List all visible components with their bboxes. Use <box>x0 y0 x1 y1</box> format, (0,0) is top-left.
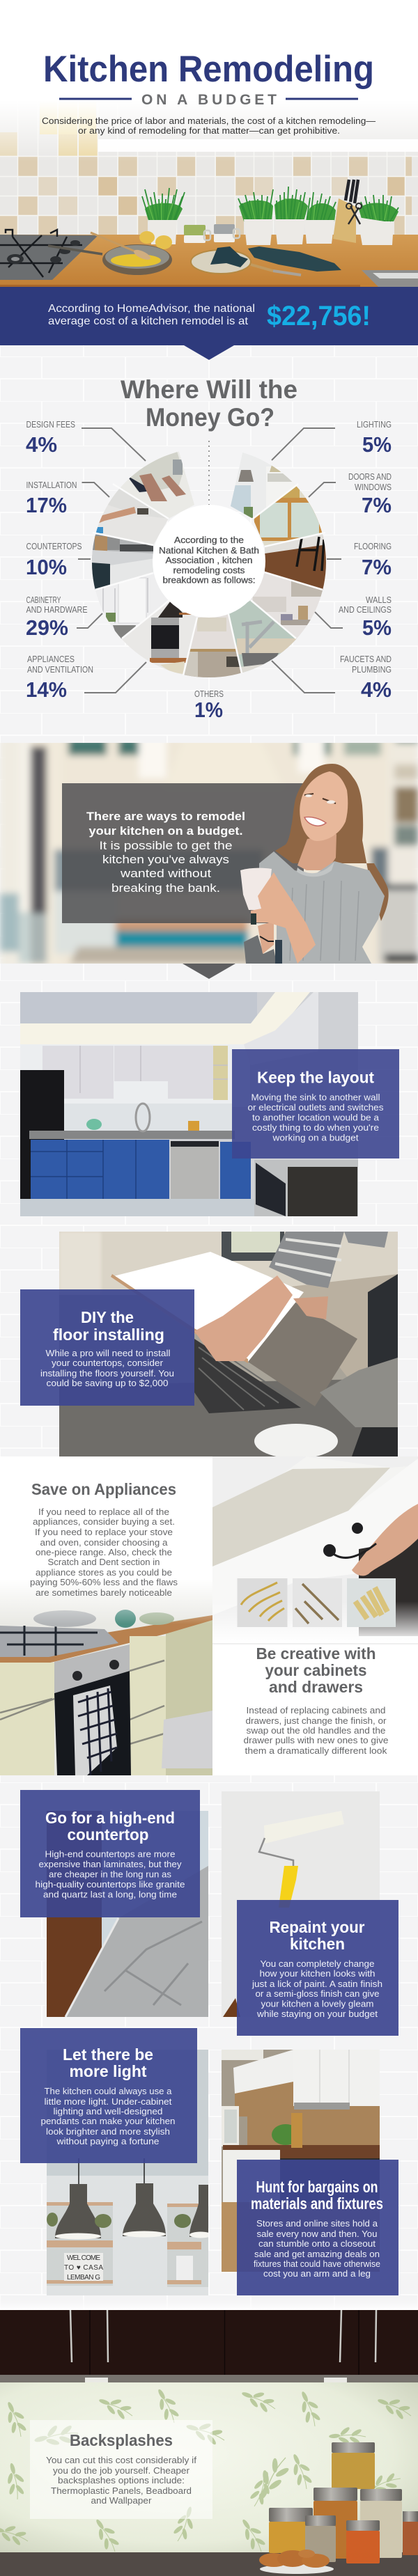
text box <box>20 1790 200 1917</box>
label: flooring <box>327 541 392 579</box>
pendant lights photo: TO ♥ CASA <box>64 2264 103 2272</box>
drawer photo <box>212 1456 418 1644</box>
pasta <box>139 231 172 249</box>
callout: donut center: According to the <box>174 535 244 545</box>
body text: The kitchen could always use a <box>45 2087 172 2096</box>
wedge: faucets <box>229 600 297 673</box>
body text <box>248 1093 383 1143</box>
box text: wanted without <box>120 867 211 880</box>
body text: are sometimes barely noticeable <box>36 1587 172 1598</box>
body text: could be saving up to $2,000 <box>46 1379 169 1388</box>
body text: installing the floors yourself. You <box>40 1369 174 1379</box>
label: appliances and ventilation <box>26 654 146 702</box>
heading: Let there be <box>63 2045 153 2064</box>
wedge: appliances <box>121 601 196 674</box>
label: walls and ceilings: WALLS <box>366 595 392 605</box>
countertop <box>0 235 418 287</box>
label: appliances and ventilation: 14% <box>26 677 67 702</box>
banner: average cost <box>0 287 418 360</box>
body text <box>46 2455 196 2506</box>
wedge: lighting <box>231 453 293 518</box>
text box <box>237 2160 398 2295</box>
body text: look brighter and more stylish <box>46 2127 170 2137</box>
label: design fees: DESIGN FEES <box>26 419 75 430</box>
heading: Save on Appliances <box>31 1480 176 1498</box>
storage jars <box>269 2442 418 2563</box>
gas stove <box>0 230 98 280</box>
label: others: 1% <box>194 698 223 722</box>
label: faucets and plumbing <box>272 654 392 702</box>
body text: can stumble onto a closeout <box>258 2239 376 2249</box>
callout: donut center <box>153 505 265 618</box>
label: walls and ceilings: 5% <box>362 615 392 640</box>
sink <box>362 270 418 287</box>
body text: little more light. Under-cabinet <box>45 2097 172 2107</box>
panel: woman in kitchen photo <box>0 738 418 968</box>
body text: sale every now and then. You <box>256 2229 378 2239</box>
panel: hunt for bargains <box>222 2050 398 2295</box>
heading: Hunt for bargains on <box>256 2178 378 2196</box>
body text: and quartz last a long, long time <box>43 1890 177 1899</box>
heading <box>45 1809 175 1844</box>
body text: your countertops, consider <box>52 1358 163 1368</box>
label: others: OTHERS <box>194 689 224 699</box>
label: flooring: FLOORING <box>354 541 392 551</box>
text box <box>30 2420 212 2519</box>
heading: floor installing <box>53 1326 164 1344</box>
woman <box>240 764 389 964</box>
label: lighting: 5% <box>362 432 392 457</box>
text box <box>20 1289 194 1406</box>
leaf wallpaper <box>0 2380 418 2554</box>
text box <box>62 783 304 923</box>
heading: Keep the layout <box>257 1068 374 1086</box>
body text: high-quality countertops like granite <box>35 1880 185 1890</box>
label: faucets and plumbing: 4% <box>361 677 392 702</box>
label: doors and windows <box>309 471 392 517</box>
body text: Thermoplastic Panels, Beadboard <box>51 2485 192 2496</box>
body text: fixtures that could have otherwise <box>254 2259 380 2269</box>
body text <box>251 1959 382 2019</box>
label: walls and ceilings: AND CEILINGS <box>339 604 392 615</box>
heading: countertop <box>67 1825 149 1844</box>
intro text: Considering the price of labor and materials, the cost of a kitchen remodeling— <box>42 116 376 126</box>
body text: how your kitchen looks with <box>259 1969 376 1979</box>
body text: just a lick of paint. A satin finish <box>251 1979 382 1989</box>
body text: them a dramatically different look <box>245 1745 387 1756</box>
cutting board with kale <box>191 246 341 275</box>
heading: your cabinets <box>265 1661 366 1679</box>
wedge: flooring <box>265 534 326 590</box>
body text: sale and get amazing deals on <box>254 2249 380 2259</box>
body text: you do the job yourself. Cheaper <box>53 2465 190 2476</box>
heading: where will the money go: Where Will the <box>121 375 297 404</box>
label: cabinetry and hardware: AND HARDWARE <box>26 604 88 615</box>
text box <box>232 1049 399 1159</box>
body text <box>40 1349 174 1388</box>
kitchen photo <box>20 992 358 1216</box>
label: lighting <box>272 419 392 460</box>
potted herbs <box>142 187 398 245</box>
body text: or electrical outlets and switches <box>248 1103 383 1113</box>
body text: Instead of replacing cabinets and <box>247 1705 386 1715</box>
heading <box>53 1308 164 1344</box>
label: design fees: 4% <box>26 432 57 457</box>
label: installation: INSTALLATION <box>26 480 77 490</box>
body text: If you need to replace your stove <box>35 1527 173 1537</box>
label: faucets and plumbing: PLUMBING <box>352 664 392 675</box>
knife block <box>333 180 362 243</box>
heading: where will the money go <box>121 375 297 432</box>
heading: materials and fixtures <box>251 2194 383 2213</box>
pendant lights photo: LEMBAN G <box>67 2274 100 2282</box>
body text: While a pro will need to install <box>46 1349 170 1358</box>
body text: Stores and online sites hold a <box>256 2219 378 2229</box>
label: cabinetry and hardware <box>26 595 102 640</box>
body text: If you need to replace all of the <box>38 1507 169 1517</box>
floor tiler photo <box>59 1232 398 1459</box>
label: design fees <box>26 419 146 461</box>
body text: without paying a fortune <box>56 2137 160 2146</box>
label: flooring: 7% <box>362 555 392 579</box>
wedge: countertops <box>92 534 153 590</box>
body text: and oven, consider choosing a <box>40 1537 168 1548</box>
body text: swap out the old handles and the <box>247 1725 386 1736</box>
panel: save on appliances <box>0 1456 212 1775</box>
label: countertops: COUNTERTOPS <box>26 541 82 551</box>
pendant lights photo <box>47 2050 212 2295</box>
donut chart: cost breakdown photos <box>92 451 326 677</box>
body text <box>40 2087 176 2146</box>
intro text: or any kind of remodeling for that matter—can get prohibitive. <box>78 126 340 136</box>
label: lighting: LIGHTING <box>357 419 392 430</box>
oven photo <box>0 1579 212 1775</box>
wedge: walls <box>251 573 323 639</box>
panel: backsplashes <box>0 2310 418 2576</box>
box text: breaking the bank. <box>111 881 220 895</box>
body text: paying 50%-60% less and the flaws <box>30 1577 178 1587</box>
label: faucets and plumbing: FAUCETS AND <box>340 654 392 664</box>
title: Kitchen Remodeling <box>43 49 374 90</box>
kitchen photo <box>222 2050 380 2272</box>
intro text <box>42 116 376 136</box>
body text: working on a budget <box>272 1133 359 1143</box>
white transition band <box>0 2296 418 2310</box>
subtitle with rules: ON A BUDGET <box>141 92 277 108</box>
banner text: According to HomeAdvisor, the national <box>48 303 255 315</box>
dotted divider <box>208 441 210 528</box>
body text: your kitchen a lovely gleam <box>261 2000 373 2009</box>
callout: donut center: Association , kitchen <box>166 555 252 565</box>
callout: donut center: breakdown as follows: <box>163 575 255 585</box>
body text: pendants can make your kitchen <box>40 2116 176 2126</box>
heading: Be creative with <box>256 1644 376 1663</box>
body text: drawer pulls with new ones to give <box>244 1735 389 1745</box>
label: installation <box>26 480 109 517</box>
body text <box>244 1705 389 1756</box>
body text: expensive than laminates, but they <box>39 1860 182 1869</box>
body text: or a semi-gloss finish can give <box>255 1989 380 1999</box>
panel: repaint your kitchen <box>222 1791 398 2036</box>
banner text: average cost of a kitchen remodel is at <box>48 315 249 327</box>
callout: donut center: National Kitchen & Bath <box>159 545 259 556</box>
body text: and Wallpaper <box>91 2495 152 2506</box>
body text: one-piece range. Also, check the <box>36 1547 172 1557</box>
body text: to another location would be a <box>252 1113 379 1122</box>
heading: DIY the <box>81 1308 134 1326</box>
wedge: installation <box>96 489 169 544</box>
body text: You can completely change <box>261 1959 375 1969</box>
body text: You can cut this cost considerably if <box>46 2455 196 2465</box>
label: doors and windows: WINDOWS <box>355 482 392 492</box>
blurred kitchen backdrop <box>0 738 418 968</box>
label: others <box>194 689 224 722</box>
body text: costly thing to do when you're <box>252 1123 379 1133</box>
text box <box>237 1900 398 2036</box>
heading <box>269 1918 365 1953</box>
heading <box>256 1644 376 1696</box>
hero kitchen photo <box>0 0 418 287</box>
body text: cost you an arm and a leg <box>263 2269 371 2279</box>
handle sample thumbnails <box>237 1578 396 1627</box>
marble photo <box>47 1811 208 2017</box>
box text: There are ways to remodel <box>86 810 245 823</box>
tile backsplash <box>0 157 412 235</box>
pendant lights photo: WEL COME <box>67 2254 100 2262</box>
heading: and drawers <box>269 1678 363 1696</box>
label: walls and ceilings <box>315 595 392 640</box>
label: countertops: 10% <box>26 555 67 579</box>
box text: kitchen you've always <box>102 853 229 866</box>
wedge: doors and windows <box>253 486 322 546</box>
label: cabinetry and hardware: 29% <box>26 615 68 640</box>
callout: donut center: remodeling costs <box>173 565 245 575</box>
wedge separators <box>93 484 325 675</box>
label: installation: 17% <box>26 493 67 517</box>
box text: It is possible to get the <box>99 839 233 852</box>
box text: your kitchen on a budget. <box>89 824 242 838</box>
heading <box>251 2178 383 2213</box>
body text: Scratch and Dent section in <box>47 1557 160 1567</box>
panel: DIY the floor installing <box>20 1232 398 1459</box>
body text: lighting and well-designed <box>53 2107 163 2116</box>
heading <box>63 2045 153 2080</box>
plate of cookies <box>259 2550 334 2574</box>
body text: Moving the sink to another wall <box>251 1093 380 1103</box>
label: countertops <box>26 541 91 579</box>
wedge: cabinetry <box>95 578 167 639</box>
body text: High-end countertops are more <box>45 1849 176 1859</box>
heading: Backsplashes <box>70 2431 173 2449</box>
countertop <box>0 2552 418 2576</box>
panel: be creative with cabinets <box>212 1456 418 1775</box>
text box <box>20 2028 197 2163</box>
wedge: others <box>184 614 241 677</box>
paint roller photo <box>222 1791 380 2017</box>
dark upper cabinets <box>0 2310 418 2382</box>
pan with spoon <box>48 233 172 275</box>
label: doors and windows: DOORS AND <box>348 471 392 482</box>
heading: kitchen <box>290 1935 345 1953</box>
heading: where will the money go: Money Go? <box>146 403 274 432</box>
label: doors and windows: 7% <box>362 493 392 517</box>
body text: appliances, consider buying a set. <box>33 1516 175 1527</box>
label: appliances and ventilation: APPLIANCES <box>27 654 75 664</box>
box text <box>86 810 245 895</box>
body text: appliance stores as you could be <box>36 1567 172 1578</box>
body text <box>254 2219 380 2279</box>
label: cabinetry and hardware: CABINETRY <box>26 595 61 605</box>
body text <box>30 1507 178 1598</box>
banner figure: $22,756! <box>267 301 371 331</box>
heading: Repaint your <box>269 1918 365 1936</box>
banner text <box>48 303 255 327</box>
arrow: photo pointer <box>183 964 235 979</box>
heading: more light <box>70 2062 147 2080</box>
wedge: design fees <box>121 451 194 518</box>
heading: Go for a high-end <box>45 1809 175 1827</box>
body text: are cheaper in the long run as <box>49 1870 171 1880</box>
panel: more light <box>20 2028 212 2295</box>
panel: high-end countertop <box>20 1790 208 2017</box>
body text: backsplashes options include: <box>58 2475 185 2485</box>
body text: drawers, just change the finish, or <box>245 1715 387 1726</box>
page background: brick wall <box>0 345 418 2310</box>
body text: while staying on your budget <box>256 2009 378 2019</box>
panel: keep the layout <box>20 992 399 1216</box>
body text <box>35 1849 185 1899</box>
cups <box>184 224 240 243</box>
label: appliances and ventilation: AND VENTILATION <box>27 664 93 675</box>
